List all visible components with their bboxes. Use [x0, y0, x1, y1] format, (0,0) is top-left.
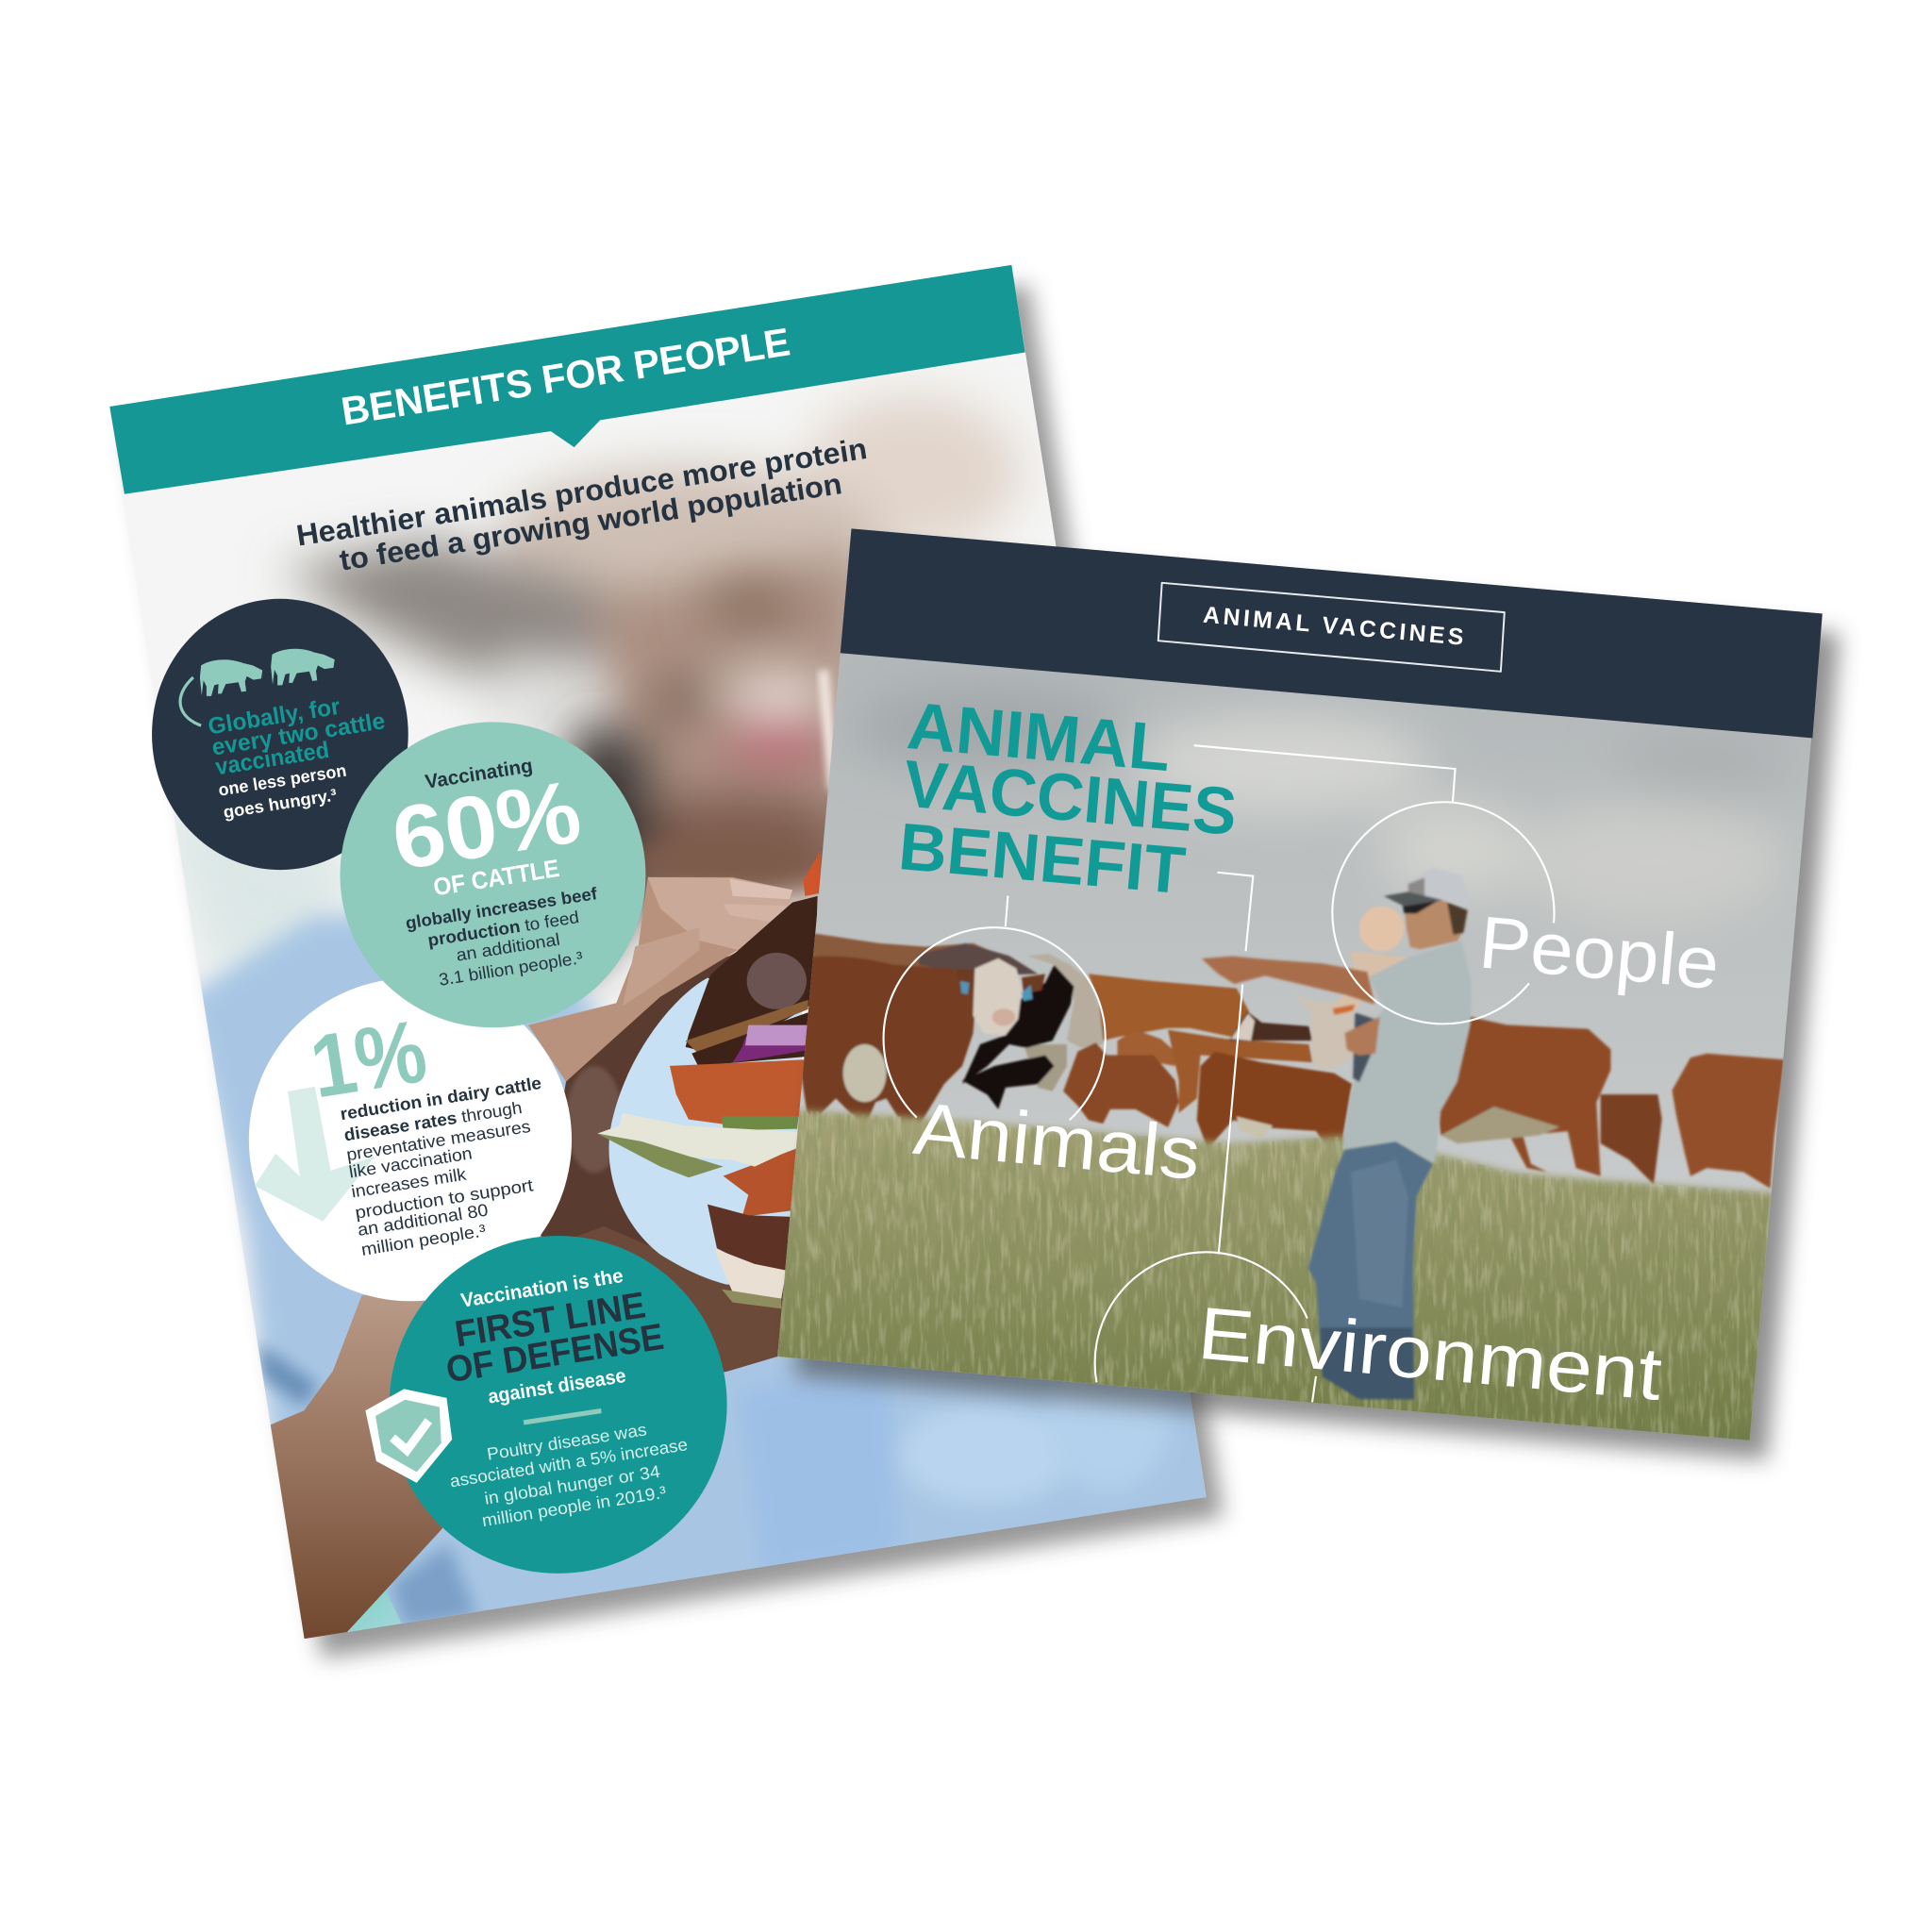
text: dairy body: disease rates through: [342, 1097, 524, 1144]
text: dairy body: preventative measures: [345, 1116, 532, 1164]
mint sleeve sliver: [349, 1591, 402, 1632]
text: globally: [207, 694, 387, 780]
text: one less person: one less person: [217, 760, 348, 800]
heading: first line of defense: [443, 1285, 666, 1391]
panel: animal vaccines: [764, 518, 1836, 1454]
heading: animal vaccines benefit: VACCINES: [901, 745, 1240, 849]
heading: animal vaccines benefit: BENEFIT: [896, 808, 1189, 908]
text: of cattle: OF CATTLE: [431, 854, 561, 901]
header band: [841, 528, 1823, 738]
straw: [818, 669, 841, 791]
heading: first line of defense: FIRST LINE: [452, 1285, 648, 1355]
text: globally: Globally, for: [207, 694, 342, 740]
text: dairy body: [339, 1073, 542, 1259]
burger: [686, 896, 818, 1057]
text: against disease: against disease: [487, 1365, 627, 1408]
text: dairy body: like vaccination: [347, 1142, 474, 1182]
heading: benefits for people: BENEFITS FOR PEOPLE: [338, 319, 793, 434]
hand and burger: [519, 833, 833, 1403]
label: animals: Animals: [910, 1087, 1204, 1195]
text: poultry body: million people in 2019.³: [480, 1482, 667, 1530]
text: dairy body: production to support: [354, 1174, 534, 1223]
number: 60%: 60%: [386, 761, 587, 889]
icon: shield with check: [365, 1389, 452, 1483]
shadow: right card: [794, 548, 1840, 1460]
man with baby: [1202, 867, 1472, 1399]
text: beef body: globally increases beef: [404, 883, 599, 933]
stat circle: 1 percent dairy: [249, 978, 572, 1301]
text: dairy body: increases milk: [350, 1164, 468, 1202]
background gap: [609, 978, 802, 1285]
connector lines and circles: [884, 745, 1554, 1402]
text: poultry body: Poultry disease was: [486, 1419, 648, 1464]
text: one less person: goes hungry.³: [222, 785, 338, 822]
forearm: [258, 1295, 477, 1641]
text: vaccinating: Vaccinating: [424, 755, 534, 793]
cattle herd: right group: [1437, 1017, 1785, 1189]
label: people: People: [1476, 901, 1723, 1005]
heading: animal vaccines benefit: ANIMAL: [905, 688, 1174, 785]
text: globally: every two cattle: [210, 708, 387, 761]
icon: two cows: [180, 649, 335, 725]
number: 1%: 1%: [304, 1001, 433, 1117]
subheading: to feed a growing world population: [338, 467, 844, 577]
heading: animal vaccines benefit: [896, 688, 1240, 908]
stat circle: cattle and hunger: [152, 599, 408, 870]
text: poultry body: [448, 1419, 689, 1530]
text: beef body: [404, 883, 599, 990]
subheading: Healthier animals produce more protein: [294, 432, 869, 553]
shadow: left card: [127, 285, 1224, 1658]
grass: [764, 1096, 1799, 1454]
panel: benefits for people: [98, 246, 1244, 1663]
stat circle: first line of defense: [365, 1236, 727, 1574]
badge: animal vaccines: [1158, 583, 1505, 672]
text: globally: vaccinated: [214, 738, 331, 780]
text: poultry body: associated with a 5% increase: [448, 1434, 689, 1491]
text: dairy body: million people.³: [359, 1220, 487, 1259]
stat circle: 60 percent of cattle: [340, 722, 645, 1027]
photo: woman eating burger: [128, 285, 1207, 1640]
cattle herd: left group: [796, 932, 1356, 1153]
text: dairy body: reduction in dairy cattle: [339, 1073, 542, 1124]
text: beef body: an additional: [455, 929, 561, 965]
text: beef body: 3.1 billion people.³: [438, 947, 584, 990]
badge: animal vaccines: ANIMAL VACCINES: [1202, 603, 1464, 651]
text: beef body: production to feed: [426, 907, 580, 950]
heading: first line of defense: OF DEFENSE: [443, 1317, 666, 1391]
text: dairy body: an additional 80: [356, 1200, 490, 1240]
icon: down arrow: [255, 1087, 375, 1222]
photo: rancher with baby and cattle: [764, 518, 1836, 1454]
text: vaccination is the: Vaccination is the: [459, 1265, 625, 1312]
label: environment: Environment: [1195, 1291, 1665, 1416]
header band: [109, 265, 1025, 494]
text: poultry body: in global hunger or 34: [483, 1461, 661, 1508]
text: one less person: [217, 760, 348, 822]
